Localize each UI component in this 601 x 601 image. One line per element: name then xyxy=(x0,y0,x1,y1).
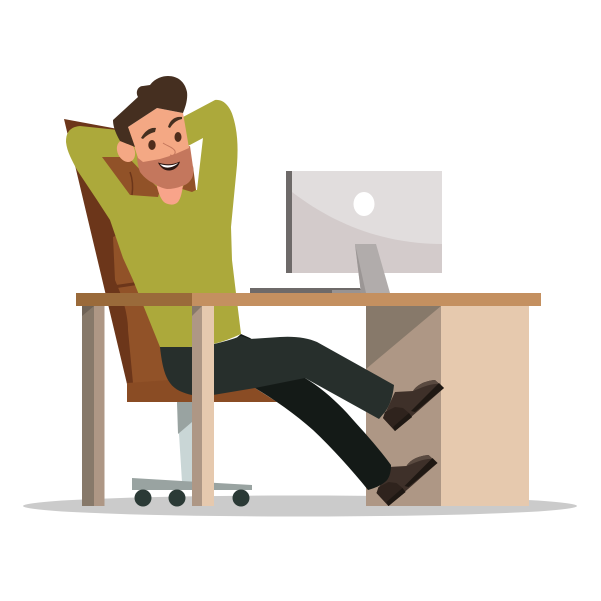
near leg xyxy=(160,336,394,419)
near desk leg xyxy=(192,306,214,506)
nose xyxy=(163,143,175,155)
far leg xyxy=(200,334,391,490)
gap between arm and head xyxy=(188,138,203,190)
neck xyxy=(157,185,183,205)
mouth xyxy=(158,162,180,171)
chair base xyxy=(132,402,252,506)
eyebrows xyxy=(141,128,156,139)
ear xyxy=(113,137,139,165)
near shoe xyxy=(383,380,444,431)
far shoe xyxy=(376,455,438,506)
desk cabinet xyxy=(366,306,529,506)
hair xyxy=(113,76,187,147)
head xyxy=(113,76,193,189)
far desk leg xyxy=(82,306,104,506)
monitor xyxy=(250,171,442,293)
chair xyxy=(64,119,277,402)
sweater xyxy=(66,100,241,347)
eyes xyxy=(148,140,156,150)
beard xyxy=(137,146,193,189)
face xyxy=(128,108,189,162)
chair behind head xyxy=(102,157,196,197)
floor shadow xyxy=(23,496,577,516)
desk top xyxy=(76,293,541,306)
